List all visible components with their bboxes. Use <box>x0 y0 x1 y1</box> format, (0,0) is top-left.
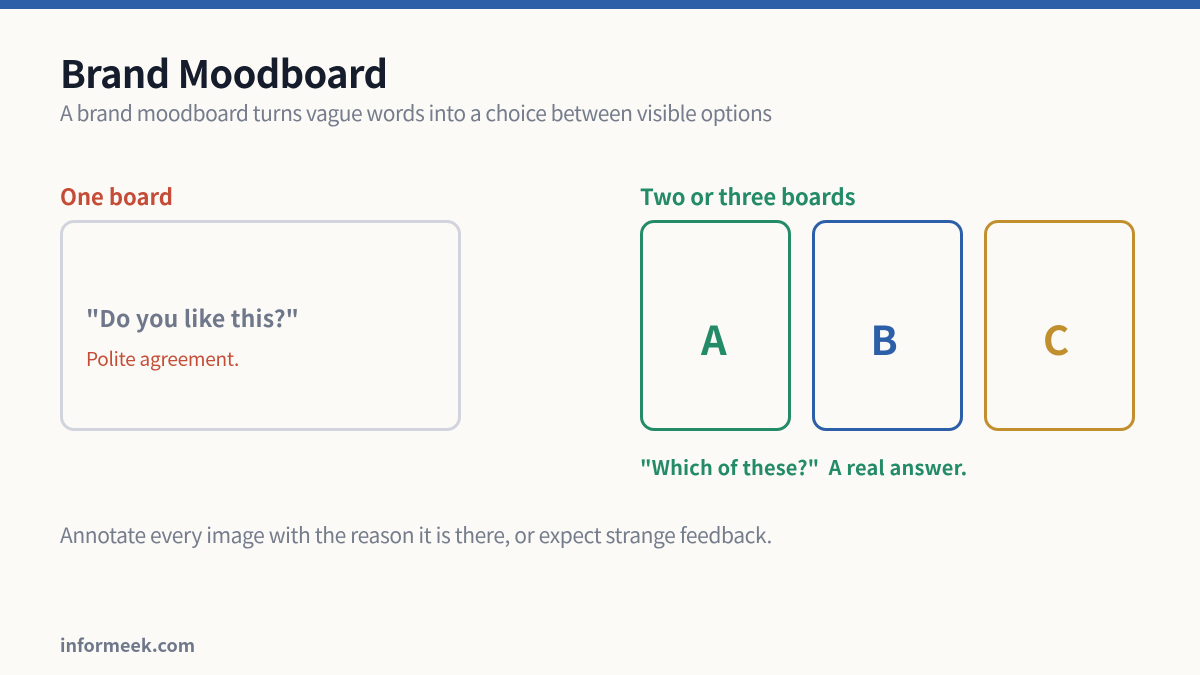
board B <box>812 220 963 431</box>
board C <box>984 220 1135 431</box>
heading: two or three boards: Two or three boards <box>640 180 855 212</box>
outcome text: "Which of these?" A real answer. <box>640 452 967 481</box>
footer brand: informeek.com <box>60 632 195 658</box>
top accent bar <box>0 0 1200 9</box>
letter A: A <box>701 309 727 367</box>
title: Brand Moodboard <box>60 44 387 99</box>
letter B: B <box>870 309 898 367</box>
board card <box>60 220 461 431</box>
annotation note: Annotate every image with the reason it is there, or expect strange feedback. <box>60 520 772 550</box>
panel: one board <box>60 180 461 431</box>
question text: "Do you like this?" <box>86 300 299 334</box>
subtitle: A brand moodboard turns vague words into a choice between visible options <box>60 98 772 128</box>
panel: two or three boards <box>640 180 1135 481</box>
result text: Polite agreement. <box>86 345 239 372</box>
board A <box>640 220 791 431</box>
letter C: C <box>1043 309 1069 367</box>
heading: one board: One board <box>60 180 173 212</box>
